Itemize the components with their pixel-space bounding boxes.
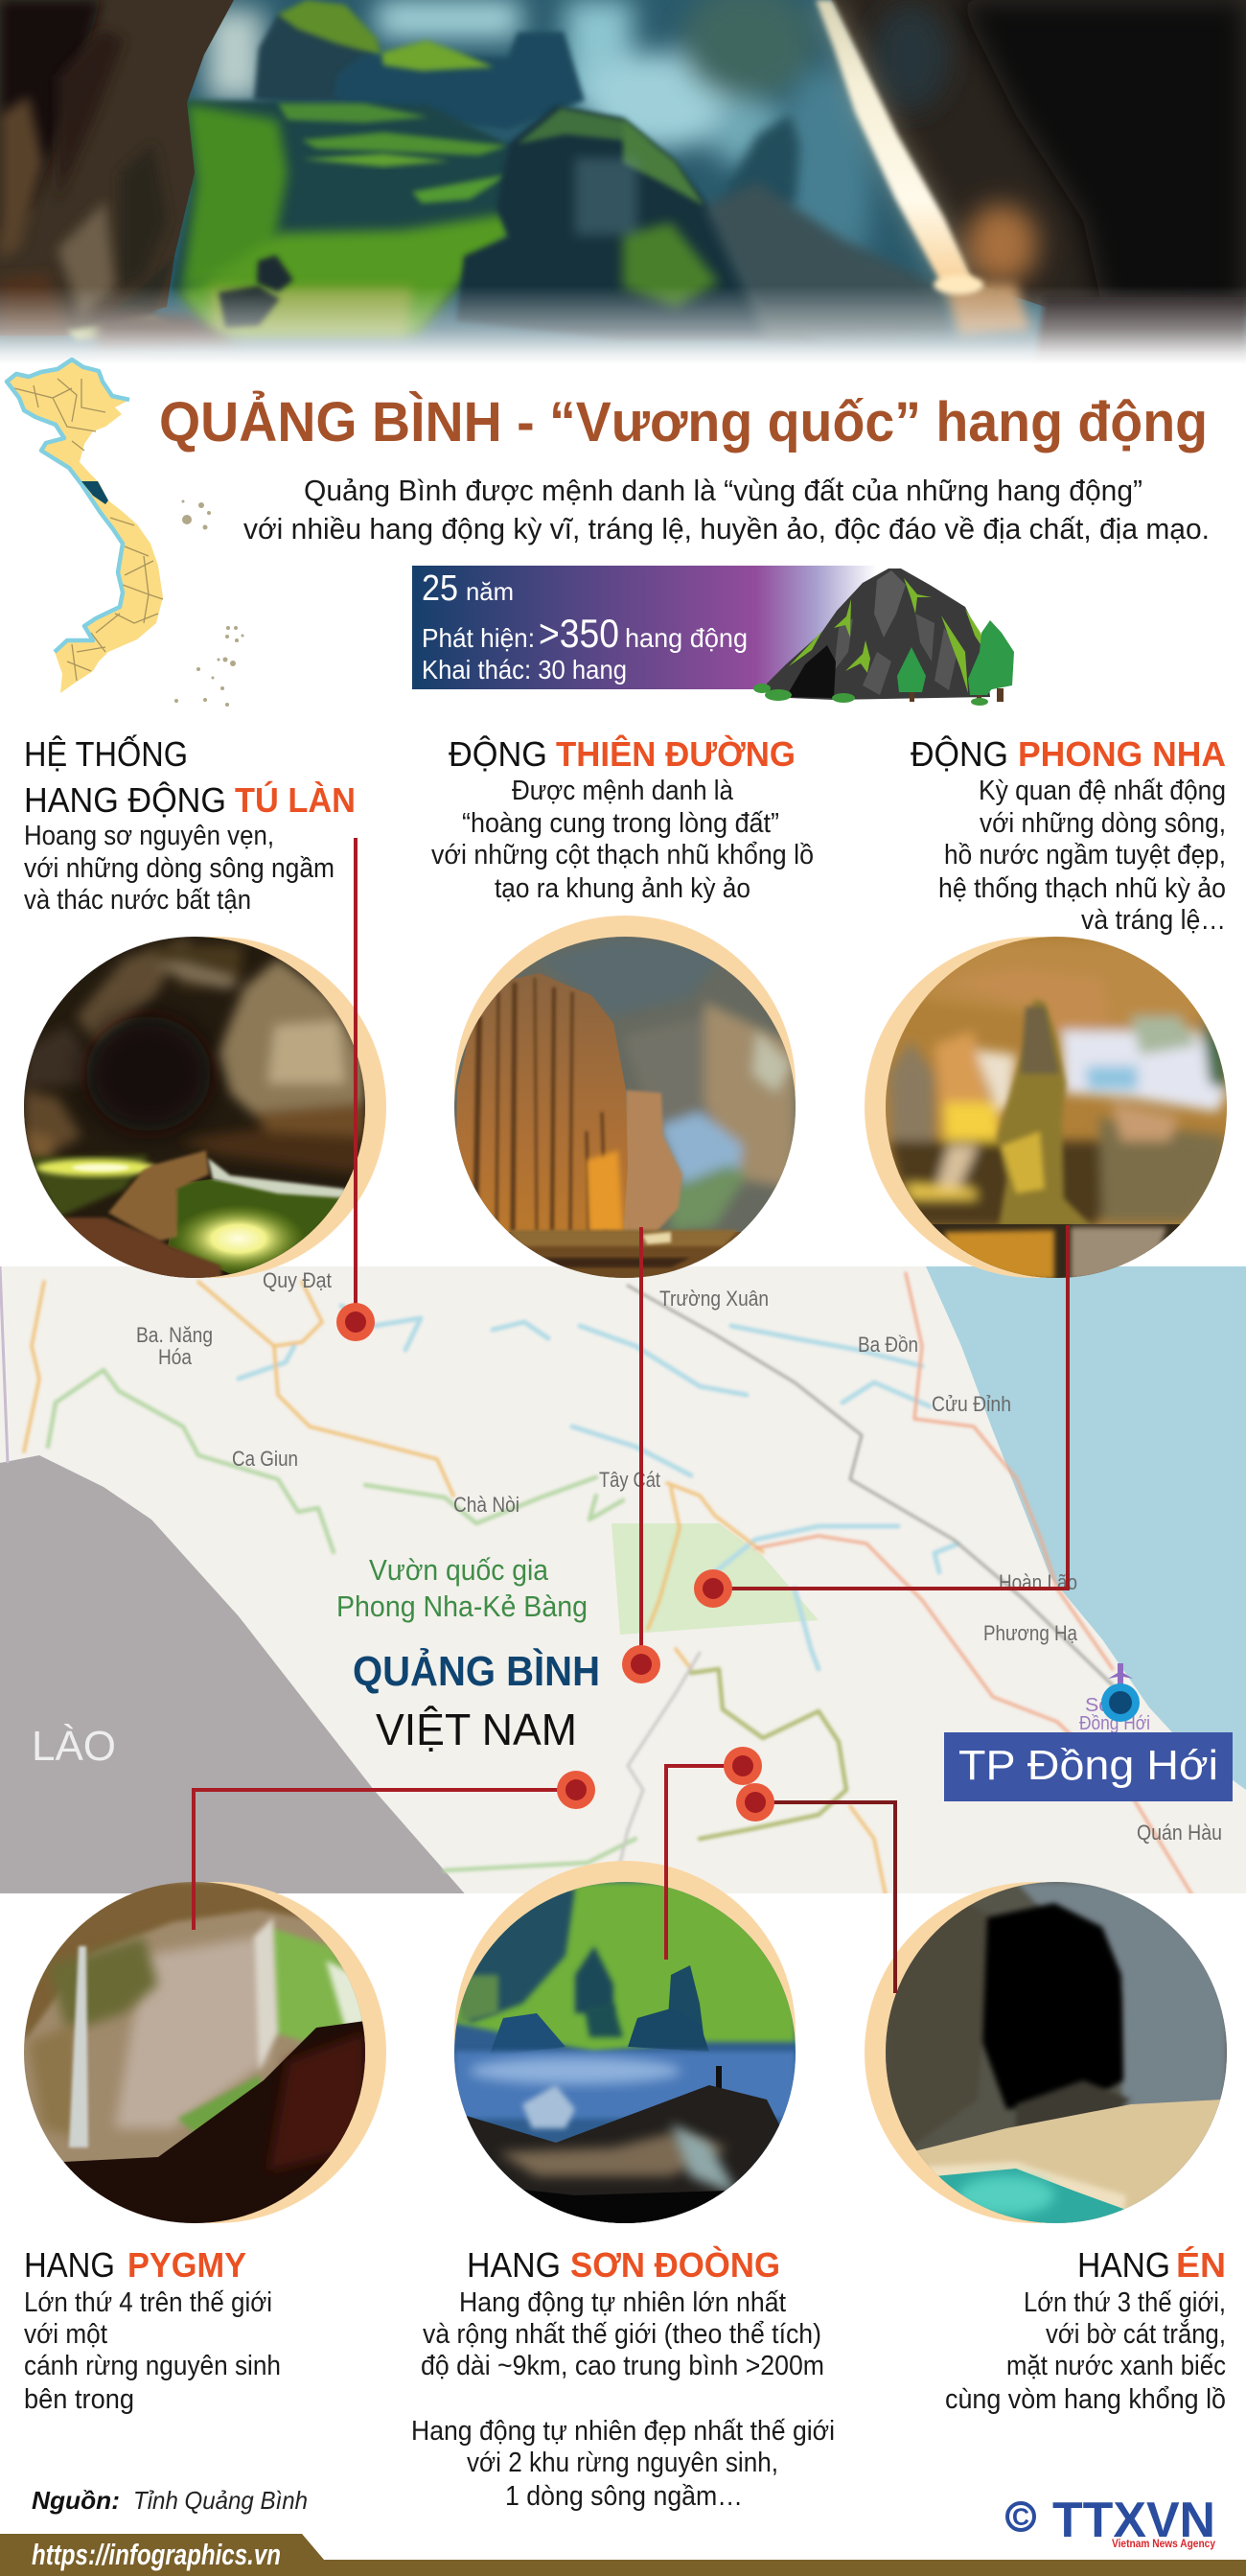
- icon: cave mountain with trees: [753, 569, 1014, 706]
- place names: Ca Giun: [232, 1447, 298, 1471]
- photo circle: Pygmy: [24, 1882, 386, 2224]
- text block: Tu Lan: Hoang sơ nguyên vẹn,: [24, 821, 274, 851]
- text block: Phong Nha: và tráng lệ…: [1081, 905, 1226, 936]
- text block: Pygmy: PYGMY: [127, 2245, 246, 2285]
- text block: Hang En: mặt nước xanh biếc: [1006, 2351, 1226, 2381]
- photo circle: Thien Duong: [454, 916, 796, 1280]
- text block: Son Doong: 1 dòng sông ngầm…: [505, 2481, 743, 2512]
- text block: Hang En: ÉN: [1176, 2245, 1226, 2285]
- text block: Son Doong: và rộng nhất thế giới (theo thể tích): [423, 2319, 821, 2350]
- source: Nguồn:: [32, 2486, 120, 2515]
- text block: Hang En: HANG: [1077, 2245, 1170, 2285]
- photo circle: Son Doong: [454, 1861, 796, 2224]
- place names: [136, 1268, 1222, 1845]
- text block: Thien Duong: THIÊN ĐƯỜNG: [556, 733, 796, 774]
- national park label: Vườn quốc gia: [369, 1553, 549, 1587]
- place names: Trường Xuân: [659, 1287, 769, 1311]
- text block: Pygmy: cánh rừng nguyên sinh: [24, 2351, 281, 2381]
- text block: Thien Duong: với những cột thạch nhũ khổng lồ: [431, 840, 814, 870]
- national park label: Phong Nha-Kẻ Bàng: [336, 1590, 588, 1623]
- source: [32, 2486, 308, 2515]
- place names: Hóa: [158, 1345, 193, 1369]
- place names: Đồng Hới: [1079, 1713, 1150, 1734]
- icon: Dong Hoi marker: [1101, 1663, 1140, 1722]
- text block: Thien Duong: tạo ra khung ảnh kỳ ảo: [495, 873, 750, 904]
- place names: Phương Hạ: [983, 1621, 1078, 1645]
- wet rocks: [704, 182, 949, 340]
- text block: Son Doong: với 2 khu rừng nguyên sinh,: [467, 2448, 778, 2478]
- photo circle: Tu Lan: [24, 937, 386, 1280]
- map markers: [336, 1303, 774, 1822]
- place names: Ba. Năng: [136, 1323, 213, 1347]
- province label: QUẢNG BÌNH: [353, 1647, 600, 1695]
- stat box: hang động: [625, 623, 748, 653]
- text block: Phong Nha: PHONG NHA: [1018, 734, 1226, 774]
- text block: Thien Duong: ĐỘNG: [449, 734, 547, 774]
- text block: Phong Nha: ĐỘNG: [911, 734, 1008, 774]
- place names: Sông: [1085, 1695, 1133, 1716]
- text block: Pygmy: Lớn thứ 4 trên thế giới: [24, 2287, 272, 2318]
- text block: Tu Lan: [24, 733, 356, 916]
- footer bar with URL: https://infographics.vn: [32, 2538, 281, 2571]
- text block: Tu Lan: HỆ THỐNG: [24, 733, 188, 774]
- text block: Tu Lan: HANG ĐỘNG: [24, 780, 226, 820]
- text block: Hang En: cùng vòm hang khổng lồ: [945, 2384, 1226, 2415]
- left rock: [0, 0, 234, 336]
- stat box: Phát hiện:: [422, 623, 535, 653]
- text block: Phong Nha: [911, 734, 1226, 936]
- back rocks: [254, 10, 377, 101]
- text block: Thien Duong: [431, 733, 814, 904]
- text block: Pygmy: bên trong: [24, 2384, 134, 2415]
- map section: [0, 1266, 1246, 1898]
- place names: Tây Cát: [599, 1468, 660, 1492]
- roads and rivers: [24, 1273, 1192, 1895]
- footer bar with URL: [0, 2534, 1246, 2576]
- connector line: Pygmy: [194, 1790, 576, 1930]
- light beam: [818, 0, 974, 288]
- national park label: [336, 1553, 588, 1623]
- right rock: [831, 0, 1246, 316]
- text block: Thien Duong: “hoàng cung trong lòng đất”: [462, 808, 779, 839]
- text block: Tu Lan: với những dòng sông ngầm: [24, 853, 335, 884]
- place names: Chà Nòi: [453, 1493, 519, 1517]
- province label: VIỆT NAM: [376, 1705, 577, 1754]
- title: QUẢNG BÌNH - “Vương quốc” hang động: [159, 391, 1208, 453]
- stat box: Khai thác: 30 hang: [422, 655, 627, 685]
- mist: [190, 0, 882, 250]
- Laos label: LÀO: [32, 1723, 116, 1770]
- text block: Tu Lan: và thác nước bất tận: [24, 885, 251, 916]
- moss terraces: [173, 101, 508, 336]
- city label: TP Dong Hoi: TP Đồng Hới: [958, 1742, 1218, 1789]
- city label: TP Dong Hoi: [944, 1732, 1233, 1801]
- province label: [353, 1647, 600, 1754]
- text block: Son Doong: Hang động tự nhiên đẹp nhất thế giới: [411, 2416, 835, 2447]
- place names: Cửu Đỉnh: [932, 1392, 1011, 1416]
- text block: Son Doong: SƠN ĐOÒNG: [570, 2244, 780, 2285]
- sea: [926, 1266, 1246, 1790]
- intro text: với nhiều hang động kỳ vĩ, tráng lệ, huyền ảo, độc đáo về địa chất, địa mạo.: [243, 512, 1210, 545]
- text block: Thien Duong: Được mệnh danh là: [512, 776, 734, 806]
- logo: TTXVN: C: [1012, 2504, 1029, 2531]
- stat box: năm: [466, 577, 514, 606]
- text block: Phong Nha: với những dòng sông,: [980, 808, 1226, 839]
- Laos area: [0, 1455, 469, 1898]
- text block: Pygmy: [24, 2245, 281, 2415]
- photo circle: Phong Nha: [865, 937, 1227, 1280]
- map of Vietnam with Quang Binh highlighted: [7, 360, 243, 707]
- intro text: Quảng Bình được mệnh danh là “vùng đất của những hang động”: [304, 474, 1142, 507]
- text block: Hang En: với bờ cát trắng,: [1046, 2318, 1226, 2350]
- connector line: Tu Lan: [354, 838, 358, 1322]
- text block: Phong Nha: hệ thống thạch nhũ kỳ ảo: [938, 873, 1226, 904]
- text block: Son Doong: [411, 2244, 835, 2512]
- logo: TTXVN: TTXVN: [1052, 2493, 1215, 2548]
- place names: Ba Đồn: [858, 1333, 918, 1357]
- connector line: Phong Nha: [713, 1225, 1068, 1589]
- text block: Phong Nha: Kỳ quan đệ nhất động: [979, 776, 1226, 806]
- national park area: [611, 1523, 819, 1635]
- text block: Son Doong: Hang động tự nhiên lớn nhất: [459, 2287, 786, 2318]
- connector line: Thien Duong: [639, 1227, 643, 1664]
- stat box: 25: [422, 569, 458, 609]
- central rock: [455, 104, 767, 340]
- place names: Quy Đạt: [263, 1268, 332, 1292]
- text block: Tu Lan: TÚ LÀN: [235, 779, 356, 820]
- photo circle: Hang En: [865, 1882, 1227, 2229]
- text block: Pygmy: HANG: [24, 2245, 115, 2285]
- text block: Pygmy: với một: [24, 2319, 107, 2350]
- text block: Hang En: [945, 2245, 1226, 2415]
- stat box: >350: [539, 611, 619, 656]
- text block: Son Doong: độ dài ~9km, cao trung bình >200m: [421, 2351, 824, 2381]
- logo: TTXVN: Vietnam News Agency: [1112, 2537, 1215, 2550]
- connector line: Hang En: [755, 1802, 895, 1993]
- reflection: [944, 283, 1030, 336]
- text block: Son Doong: HANG: [467, 2245, 561, 2285]
- connector line: Son Doong: [666, 1766, 743, 1960]
- place names: Quán Hàu: [1137, 1821, 1222, 1845]
- bottom dark: [96, 312, 240, 350]
- intro text: [243, 474, 1210, 545]
- place names: Hoàn Lão: [999, 1570, 1077, 1594]
- hero photo: cave interior: [0, 0, 1246, 364]
- stat box: [412, 566, 878, 689]
- source: Tỉnh Quảng Bình: [133, 2486, 308, 2515]
